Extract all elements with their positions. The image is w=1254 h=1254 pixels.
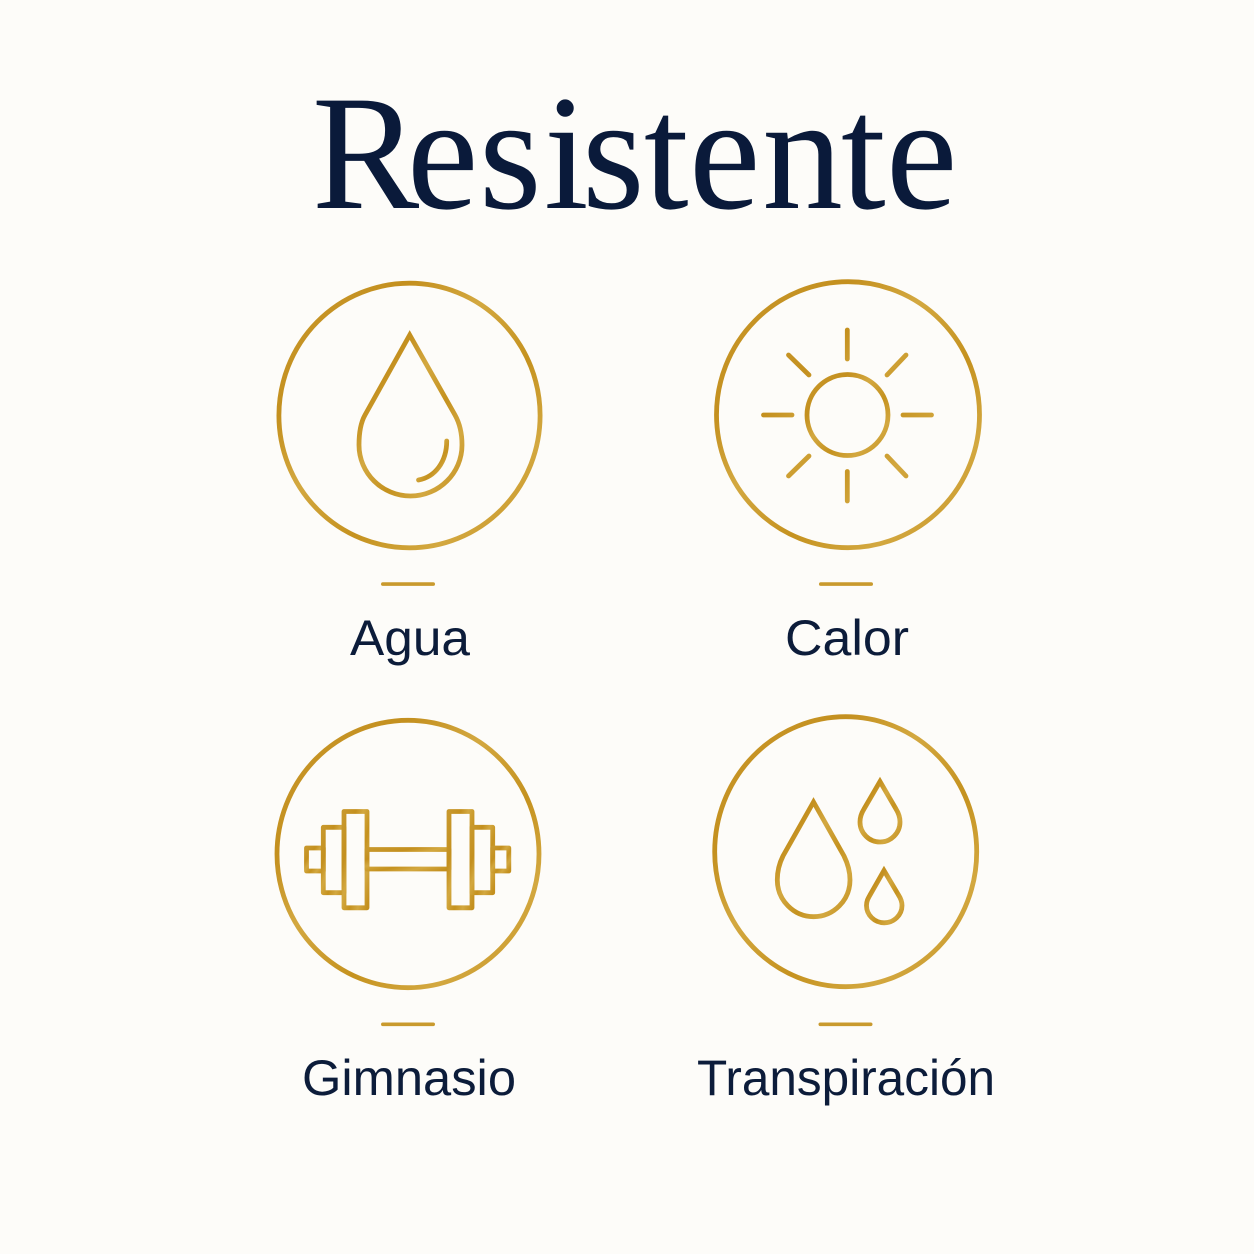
icon: sun [716,282,980,548]
divider [819,582,873,586]
panel: calor [716,282,980,666]
label: gimnasio: Gimnasio [302,1050,516,1106]
divider [381,1022,435,1026]
icon: sweat drops [715,717,977,987]
label: agua: Agua [350,610,470,666]
title: Resistente [312,63,957,244]
divider [818,1022,872,1026]
panel: agua [279,283,540,666]
icon: water drop [279,283,540,548]
label: calor: Calor [785,610,909,666]
divider [381,582,435,586]
label: transpiracion: Transpiración [697,1050,995,1106]
panel: gimnasio [277,720,539,1106]
icon: dumbbell [277,720,539,988]
panel: transpiracion [697,717,995,1106]
